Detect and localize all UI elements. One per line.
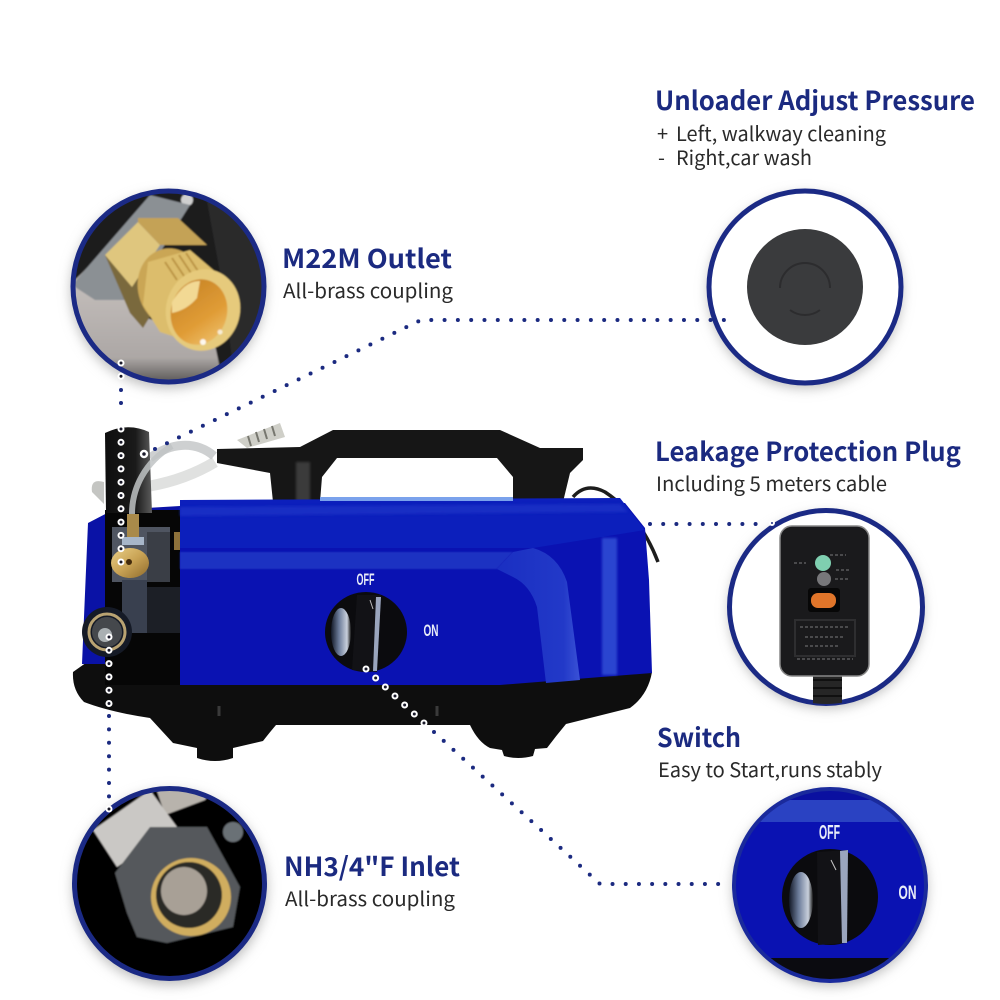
circle frame [74,788,264,978]
photo: inlet coupling [77,791,262,976]
dark recess with pump [105,510,181,685]
callout connector lines [109,320,774,884]
label ON: ON [898,883,916,904]
circle frame [73,191,264,382]
heading: Leakage Protection Plug [655,432,961,469]
handle leg highlight [296,462,310,502]
photo: brass outlet [76,194,262,380]
light strip under handle [320,497,513,501]
minus sign: - [658,142,665,171]
circle shadow [71,194,265,388]
line: switch navy [434,732,731,884]
plus sign: + [657,118,668,147]
icon: RCD plug [780,526,869,710]
heading: NH3/4"F Inlet [284,847,460,884]
line: inlet white part [106,637,112,810]
nozzle holder [105,427,152,513]
circle shadow [73,791,267,985]
power cable [573,488,658,562]
panel: M22M outlet [70,188,453,392]
line: switch white part [366,669,424,723]
circle shadow [708,194,902,388]
panel: NH3/4 inlet [70,785,460,985]
heading: M22M Outlet [282,239,452,276]
hose end fitting [237,423,285,448]
upper gloss [180,504,628,516]
photo: switch closeup [736,791,924,979]
body: Including 5 meters cable [656,468,887,497]
label ON: ON [424,621,438,640]
top highlight band [180,498,645,548]
panel: unloader [655,81,975,388]
panel: leakage plug [655,432,961,710]
line: switch white inner [366,669,424,723]
main blue body [180,503,652,685]
left blue side panel [82,506,180,664]
inlet fitting [82,607,132,657]
label OFF: OFF [819,822,840,844]
line: unloader white dot [141,451,147,457]
line: outlet navy [119,390,123,416]
handle [217,430,583,502]
black base [73,660,652,761]
circle frame [730,510,922,704]
panel: switch [657,718,935,988]
switch knob [325,592,407,672]
pressure washer machine [73,423,658,761]
line: plug [650,522,768,526]
circle frame [709,191,901,383]
circle frame [734,789,926,981]
line: inlet white inner [108,637,110,810]
line: outlet white part [118,363,124,563]
line: inlet navy [107,716,111,797]
right gloss strip [602,538,617,675]
angled side panel [497,548,580,683]
line: outlet white inner [120,363,122,563]
body: Easy to Start,runs stably [658,754,883,783]
base slot marks [219,706,437,716]
tube front [132,446,172,514]
heading: Unloader Adjust Pressure [655,81,975,118]
label OFF: OFF [356,571,374,589]
circle shadow [729,514,923,708]
line: unloader diagonal and horizontal [155,320,730,449]
line: plug white dot [770,521,774,525]
body line 1: Left, walkway cleaning [676,118,886,147]
icon: rubber knob [747,229,863,345]
transparent tube [92,445,215,504]
body: All-brass coupling [285,883,455,912]
body line 2: Right,car wash [676,142,812,171]
circle shadow [733,792,927,986]
body: All-brass coupling [283,275,453,304]
side highlight band [180,552,513,569]
brass outlet fitting [111,514,180,633]
heading: Switch [657,718,741,755]
